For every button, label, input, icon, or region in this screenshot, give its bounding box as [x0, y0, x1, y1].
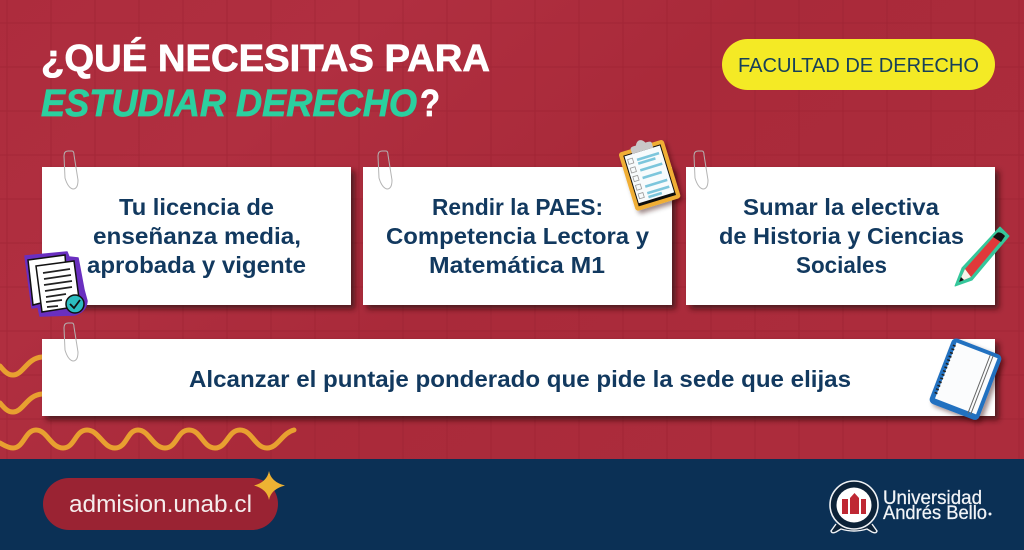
- title: ¿QUÉ NECESITAS PARA: [41, 36, 490, 80]
- icon: star: [254, 471, 285, 500]
- card: PAES: Matemática M1: [429, 252, 605, 278]
- card: PAES: [363, 167, 672, 305]
- card: licencia: Tu licencia de: [119, 194, 274, 220]
- icon: paperclip 4: [64, 323, 78, 361]
- icon: documents with check: [25, 252, 87, 316]
- card: electiva: Sumar la electiva: [743, 194, 939, 220]
- icon: paperclip 3: [694, 151, 708, 189]
- title: ESTUDIAR DERECHO: [41, 83, 417, 125]
- icon: paperclip 1: [64, 151, 78, 189]
- logo: Universidad Andrés Bello: [830, 481, 992, 533]
- card: electiva: [686, 167, 995, 305]
- card: puntaje ponderado: [42, 339, 995, 416]
- card: puntaje ponderado: Alcanzar el puntaje ponderado que pide la sede que elijas: [189, 366, 851, 392]
- card: licencia: aprobada y vigente: [87, 252, 306, 278]
- decorative waves: [0, 357, 294, 448]
- card: electiva: Sociales: [796, 252, 887, 278]
- icon: clipboard: [616, 134, 681, 211]
- card: licencia: [42, 167, 351, 305]
- url pill: admision.unab.cl: [69, 491, 252, 518]
- card: licencia: enseñanza media,: [93, 223, 301, 249]
- icon: notebook: [928, 337, 1003, 421]
- logo: Universidad Andrés Bello: Universidad: [883, 488, 982, 509]
- icon: paperclip 2: [378, 151, 392, 189]
- logo: Universidad Andrés Bello: Andrés Bello: [883, 503, 987, 524]
- card: PAES: Rendir la PAES:: [432, 194, 603, 220]
- card: PAES: Competencia Lectora y: [386, 223, 649, 249]
- badge: facultad de derecho: [722, 39, 995, 90]
- url pill: [43, 478, 278, 530]
- card: electiva: de Historia y Ciencias: [719, 223, 964, 249]
- title: ?: [420, 83, 440, 125]
- icon: pencil: [955, 227, 1009, 286]
- badge: facultad de derecho: FACULTAD DE DERECHO: [738, 54, 979, 77]
- title: [41, 36, 490, 125]
- footer band: [0, 459, 1024, 550]
